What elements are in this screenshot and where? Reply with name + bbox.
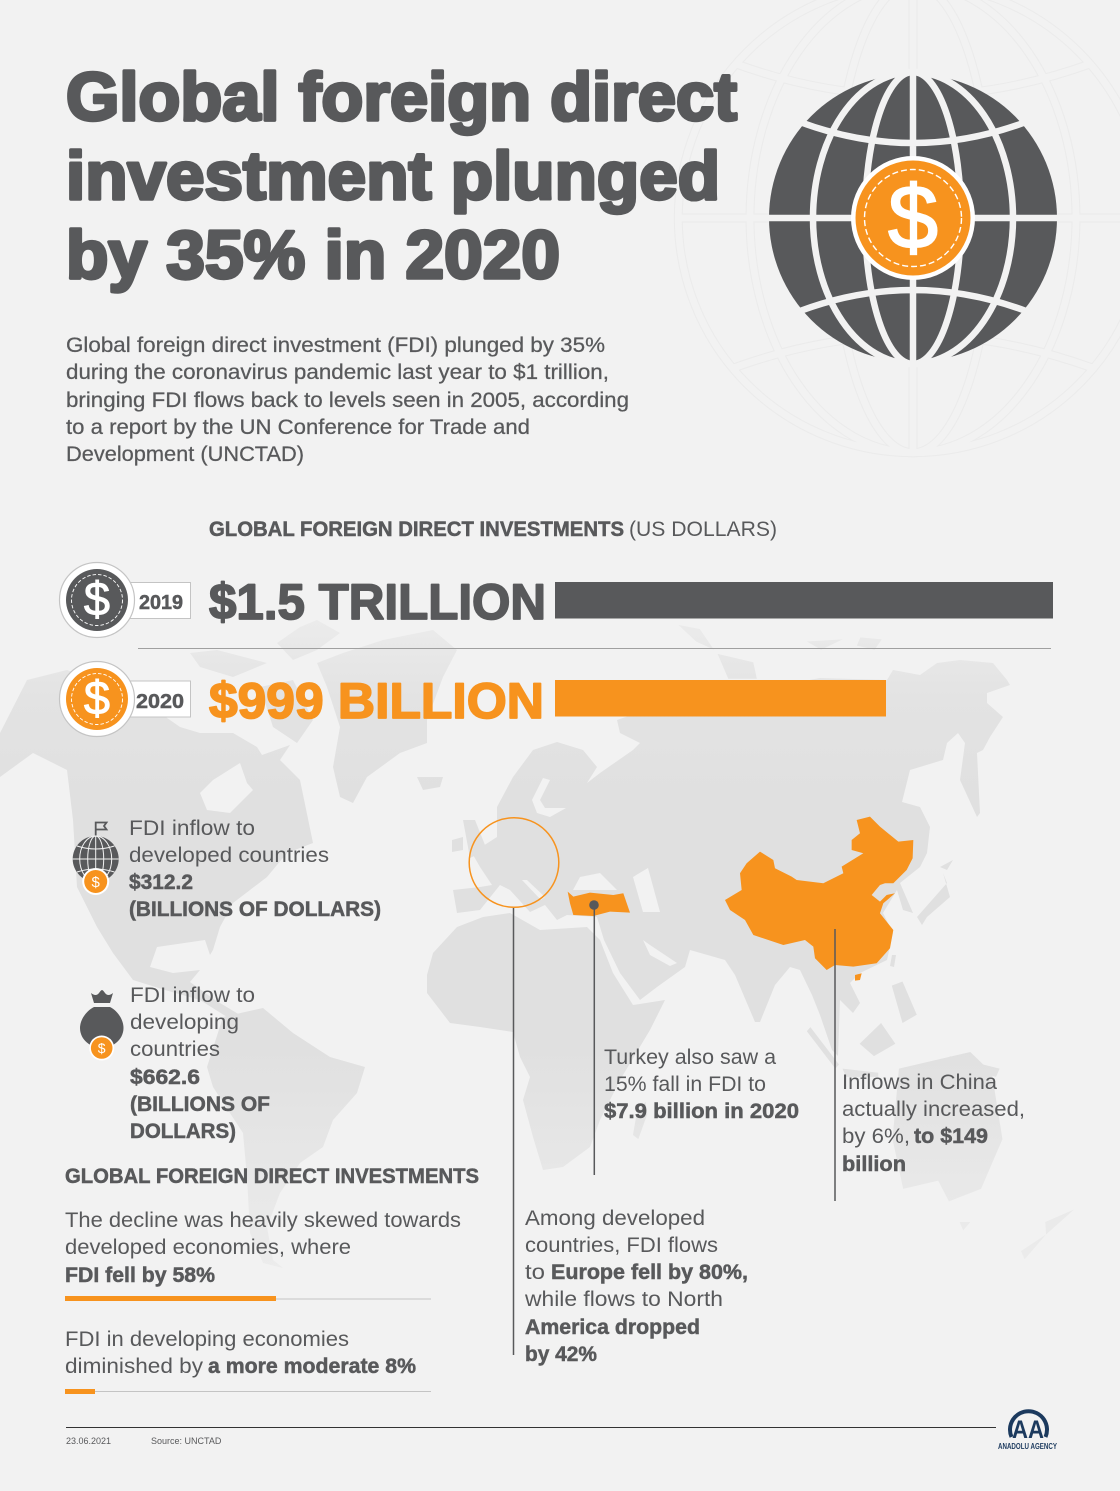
badge: 2019: $ <box>84 572 110 625</box>
logo: Anadolu Agency <box>998 1411 1057 1451</box>
text: developing economies decline <box>65 1328 416 1378</box>
icon: globe with flag: $ <box>92 874 101 891</box>
text: developing economies decline: diminished by <box>65 1355 204 1378</box>
text: developing countries inflow: developing <box>130 1011 239 1034</box>
title: Global foreign direct <box>66 59 737 135</box>
text: developing countries inflow: (BILLIONS OF <box>130 1093 270 1116</box>
callout: China: billion <box>842 1153 906 1176</box>
icon: money bag: $ <box>98 1040 106 1056</box>
callout: China: by 6%, <box>842 1125 910 1148</box>
map highlight: Turkey <box>568 892 630 916</box>
callout: China: Inflows in China <box>842 1071 997 1094</box>
text: developing countries inflow: DOLLARS) <box>130 1120 236 1143</box>
icon: globe with dollar coin <box>765 70 1061 366</box>
value: 2019: $1.5 TRILLION <box>209 574 546 630</box>
text: developed economies decline: The decline was heavily skewed towards <box>65 1209 461 1232</box>
background globe watermark <box>678 0 1120 453</box>
callout: Europe and North America: by 42% <box>525 1343 597 1366</box>
badge: 2019 <box>60 562 190 638</box>
badge: 2019: 2019 <box>139 592 183 614</box>
footer: 23.06.2021 <box>66 1436 111 1446</box>
callout: Europe and North America <box>524 1207 748 1366</box>
callout: Europe and North America: countries, FDI flows <box>525 1234 718 1257</box>
title: by 35% in 2020 <box>66 217 560 293</box>
text: developing economies decline: a more moderate 8% <box>208 1355 416 1378</box>
intro paragraph: Development (UNCTAD) <box>66 443 304 466</box>
text: developed economies decline: developed economies, where <box>65 1236 351 1259</box>
callout: Europe and North America: while flows to North <box>524 1288 723 1311</box>
bar: 58% fall <box>65 1296 431 1301</box>
text: developed countries inflow: $312.2 <box>129 871 193 894</box>
text: developing countries inflow: countries <box>130 1038 220 1061</box>
footer <box>66 1427 996 1446</box>
text: developed countries inflow <box>129 817 381 921</box>
value: 2020: $999 BILLION <box>209 673 544 729</box>
text: developed economies decline: FDI fell by 58% <box>65 1264 215 1287</box>
footer: Source: UNCTAD <box>151 1436 222 1446</box>
chart heading: GLOBAL FOREIGN DIRECT INVESTMENTS <box>209 518 624 541</box>
callout: Turkey: 15% fall in FDI to <box>604 1073 766 1096</box>
callout: Turkey: Turkey also saw a <box>604 1046 776 1069</box>
icon: globe with flag <box>73 822 119 895</box>
bar: 2019 <box>555 582 1053 618</box>
badge: 2020 <box>60 662 190 736</box>
badge: 2020: 2020 <box>136 691 184 713</box>
text: developing countries inflow <box>130 984 270 1143</box>
text: developed countries inflow: developed countries <box>129 844 329 867</box>
text: developed countries inflow: (BILLIONS OF DOLLARS) <box>129 898 381 921</box>
icon: globe with dollar coin: $ <box>888 168 938 268</box>
intro paragraph: bringing FDI flows back to levels seen in 2005, according <box>66 389 629 412</box>
badge: 2020: $ <box>84 671 110 724</box>
logo: Anadolu Agency: ANADOLU AGENCY <box>998 1441 1057 1451</box>
world map background <box>0 620 1074 1268</box>
section heading: GLOBAL FOREIGN DIRECT INVESTMENTS <box>65 1165 479 1188</box>
callout: Europe and North America: Europe fell by 80%, <box>551 1261 748 1284</box>
map highlight: China <box>725 817 913 981</box>
bar: 8% fall <box>65 1389 431 1394</box>
text: developing countries inflow: $662.6 <box>130 1066 200 1089</box>
icon: money bag <box>80 990 124 1060</box>
callout: China: to $149 <box>914 1125 988 1148</box>
logo: Anadolu Agency: AA <box>1012 1416 1044 1444</box>
callout: Turkey <box>604 1046 799 1123</box>
text: developing economies decline: FDI in developing economies <box>65 1328 349 1351</box>
callout: China <box>842 1071 1025 1176</box>
intro paragraph: to a report by the UN Conference for Trade and <box>66 416 530 439</box>
callout: China: actually increased, <box>842 1098 1025 1121</box>
intro paragraph <box>66 334 629 466</box>
text: developed economies decline <box>65 1209 461 1287</box>
bar: 2020 <box>555 680 886 716</box>
callout: Europe and North America: to <box>525 1261 545 1284</box>
leader lines and Turkey marker <box>514 900 835 1355</box>
chart heading: (US DOLLARS) <box>629 518 777 541</box>
intro paragraph: Global foreign direct investment (FDI) plunged by 35% <box>66 334 605 357</box>
text: developing countries inflow: FDI inflow to <box>130 984 255 1007</box>
title <box>66 59 737 293</box>
callout: Europe and North America: America dropped <box>525 1316 700 1339</box>
title: investment plunged <box>66 138 720 214</box>
callout: Europe and North America: Among developed <box>525 1207 705 1230</box>
intro paragraph: during the coronavirus pandemic last year to $1 trillion, <box>66 361 609 384</box>
text: developed countries inflow: FDI inflow to <box>129 817 255 840</box>
map highlight: Europe ring <box>469 818 559 907</box>
callout: Turkey: $7.9 billion in 2020 <box>604 1100 799 1123</box>
